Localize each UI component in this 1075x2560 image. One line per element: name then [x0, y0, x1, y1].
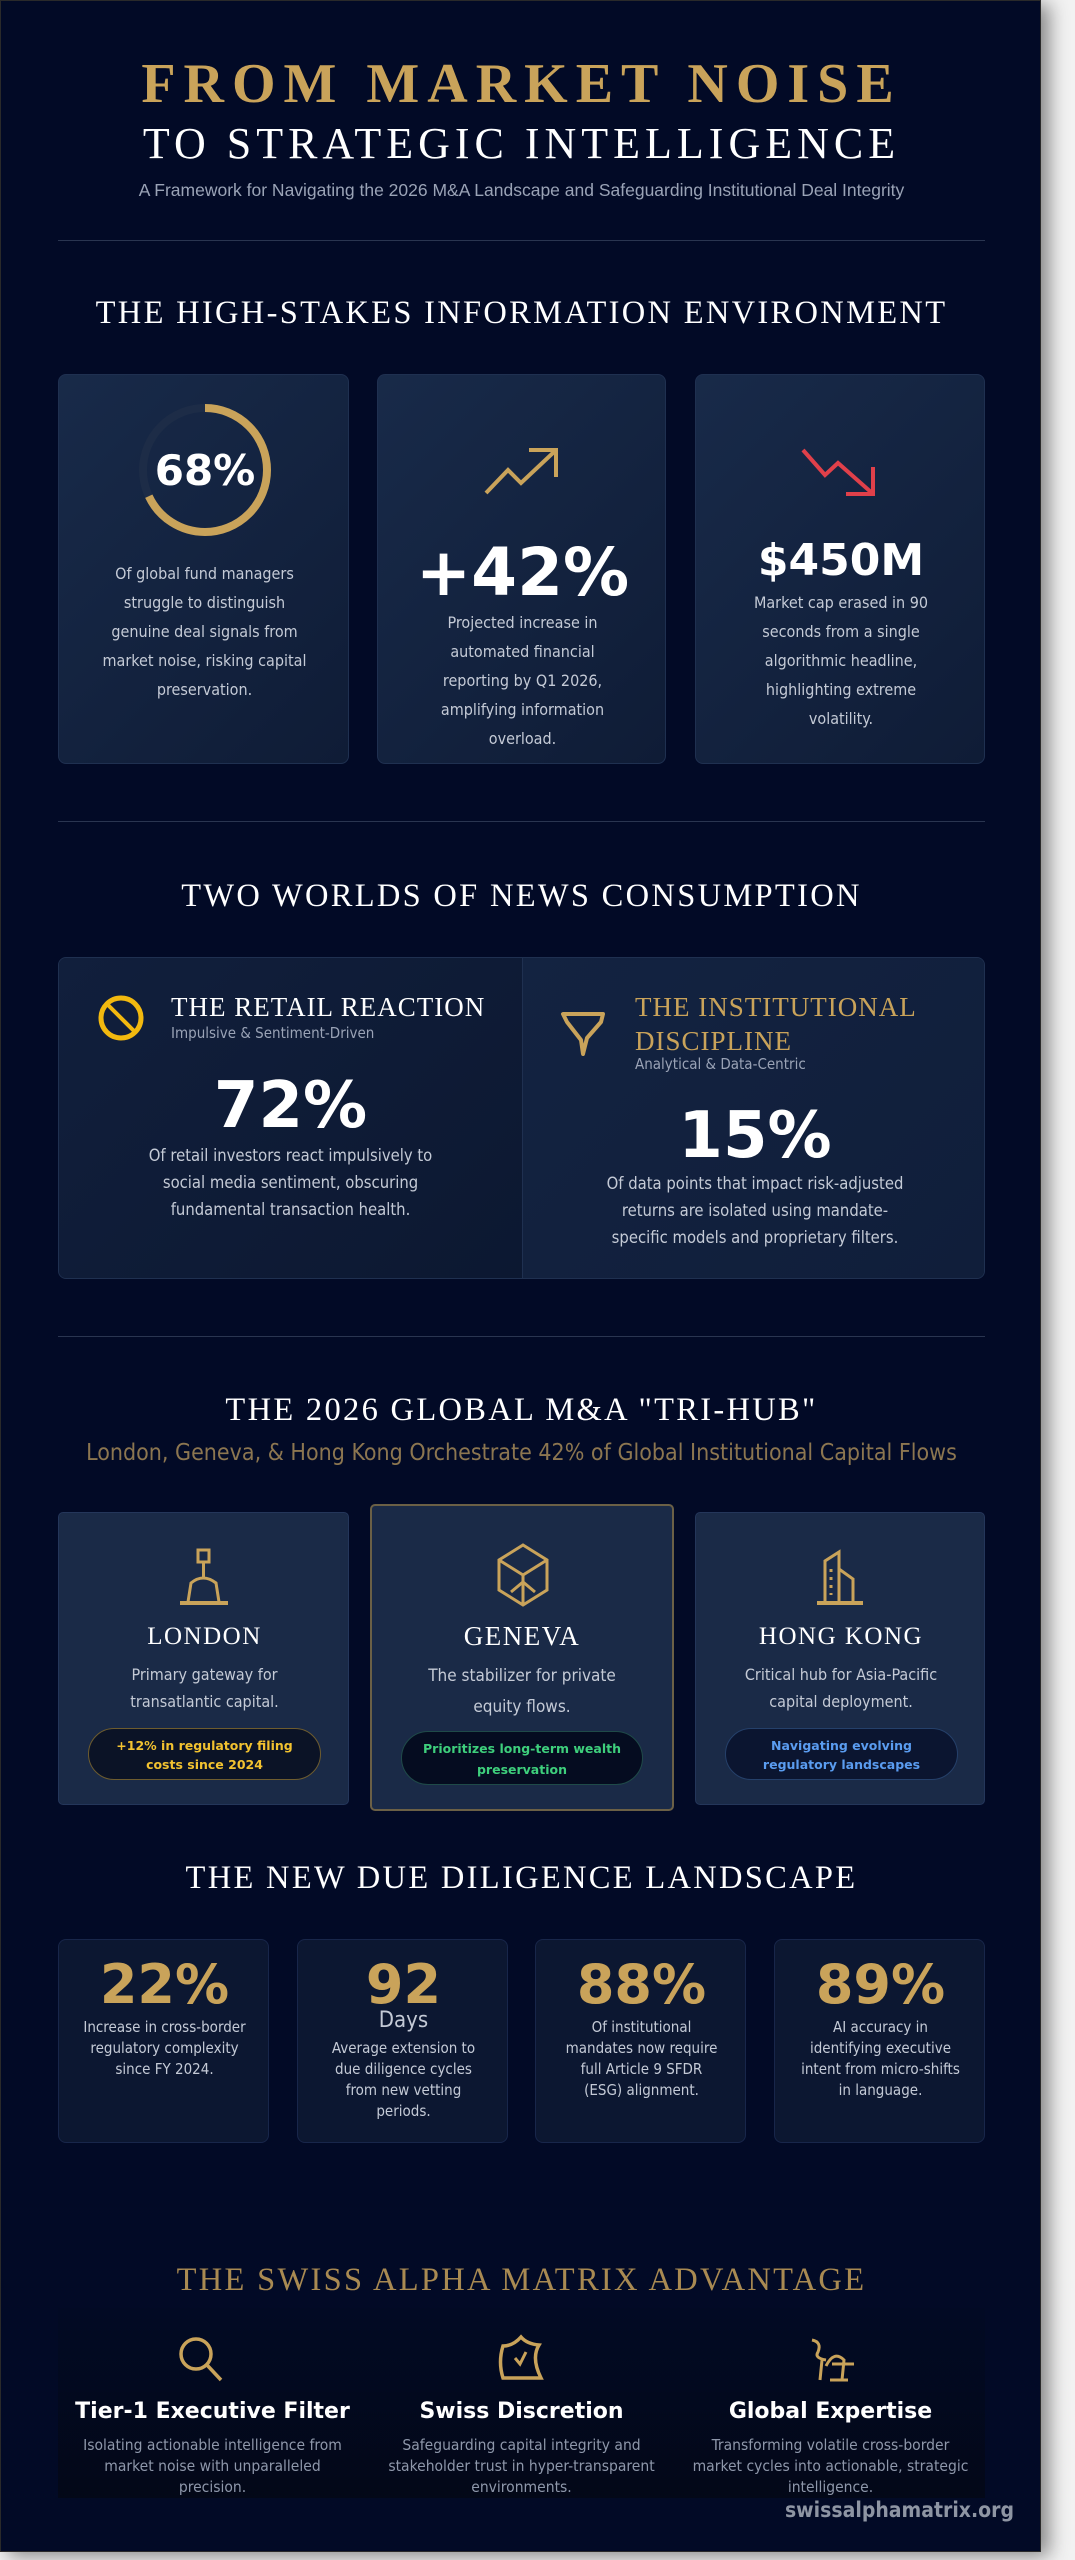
card: $450M	[695, 374, 985, 764]
panel: advantages	[58, 2308, 985, 2498]
card: 89%	[774, 1939, 985, 2143]
card: 92 days: 92	[366, 1953, 441, 2016]
heading: tri-hub: THE 2026 GLOBAL M&A "TRI-HUB"	[225, 1392, 818, 1428]
advantage: filter: Isolating actionable intelligence from market noise with unparalleled precision.	[83, 2436, 342, 2496]
card: 22%: 22%	[100, 1953, 229, 2016]
advantage: discretion	[388, 2334, 655, 2496]
card: hong kong: Critical hub for Asia-Pacific capital deployment.	[745, 1665, 937, 1711]
heading: swiss alpha: THE SWISS ALPHA MATRIX ADVANTAGE	[177, 2262, 866, 2298]
advantage: global: intelligence.	[788, 2478, 873, 2496]
subtitle: tri-hub: London, Geneva, & Hong Kong Orchestrate 42% of Global Institutional Capital Flows	[86, 1440, 957, 1466]
card: 92 days: Days	[379, 2008, 428, 2033]
advantage: discretion: Safeguarding capital integrity and stakeholder trust in hyper-transparent environments.	[388, 2436, 655, 2496]
card: $450M: Market cap erased in 90 seconds from a single algorithmic headline, highlighting extreme volatility.	[754, 593, 928, 728]
card: geneva: The stabilizer for private equity flows.	[428, 1666, 616, 1717]
advantage: global	[693, 2338, 968, 2496]
panel: institutional: Of data points that impact risk-adjusted returns are isolated using mandate-specific models and proprietary filters.	[607, 1174, 903, 1247]
card: geneva: preservation	[477, 1762, 567, 1777]
card: 88%: 88%	[577, 1953, 706, 2016]
card: 88%: Of institutional mandates now require full Article 9 SFDR (ESG) alignment.	[566, 2018, 717, 2099]
panel: retail: Impulsive & Sentiment-Driven	[171, 1024, 374, 1042]
card: +42%: Projected increase in automated financial reporting by Q1 2026, amplifying information overload.	[441, 613, 604, 748]
panel: news consumption	[58, 957, 985, 1279]
card: 92 days: Average extension to due diligence cycles from new vetting periods.	[332, 2039, 475, 2120]
stat: +42%	[416, 534, 629, 611]
panel: retail: Of retail investors react impulsively to social media sentiment, obscuring fundamental transaction health.	[149, 1146, 432, 1219]
panel: retail: THE RETAIL REACTION	[171, 992, 485, 1022]
card: 89%: 89%	[816, 1953, 945, 2016]
card: london: Primary gateway for transatlantic capital.	[130, 1665, 279, 1711]
panel: institutional: Analytical & Data-Centric	[635, 1055, 806, 1073]
icon: london	[180, 1548, 228, 1605]
icon: retail	[98, 996, 144, 1040]
card: hong kong: regulatory landscapes	[763, 1757, 920, 1772]
card: +42%	[377, 374, 666, 764]
icon: trend up	[484, 448, 558, 494]
advantage: filter: Tier-1 Executive Filter	[75, 2399, 350, 2424]
panel: retail: 72%	[214, 1069, 367, 1143]
card: london: LONDON	[147, 1623, 262, 1650]
text: Of global fund managers struggle to distinguish genuine deal signals from market noise, risking capital preservation.	[103, 564, 306, 699]
heading: high-stakes: THE HIGH-STAKES INFORMATION ENVIRONMENT	[96, 295, 947, 331]
panel: institutional: 15%	[678, 1099, 832, 1173]
icon: hong kong	[817, 1549, 863, 1605]
title: FROM MARKET NOISE	[141, 53, 902, 115]
icon: geneva	[498, 1543, 548, 1607]
panel: institutional	[522, 958, 986, 1280]
pill: +12% in regulatory filing	[116, 1738, 293, 1753]
pill: costs since 2024	[146, 1757, 263, 1772]
card: hong kong	[695, 1512, 985, 1805]
card: $450M: $450M	[758, 535, 924, 586]
heading: two worlds: TWO WORLDS OF NEWS CONSUMPTION	[181, 878, 862, 914]
advantage: discretion: Swiss Discretion	[419, 2399, 624, 2424]
advantage: filter	[75, 2337, 350, 2496]
title: TO STRATEGIC INTELLIGENCE	[143, 119, 900, 168]
title	[141, 53, 902, 168]
subtitle: A Framework for Navigating the 2026 M&A Landscape and Safeguarding Institutional Deal Integrity	[139, 180, 904, 200]
icon: funnel	[560, 1012, 605, 1056]
card: hong kong: Navigating evolving	[771, 1738, 912, 1753]
panel: institutional: THE INSTITUTIONAL	[635, 992, 917, 1022]
card: 88%	[535, 1939, 746, 2143]
card: 68%	[58, 374, 349, 764]
panel: retail	[59, 958, 522, 1280]
panel: institutional: DISCIPLINE	[635, 1026, 792, 1056]
card: 92 days	[297, 1939, 508, 2143]
card: geneva: GENEVA	[464, 1621, 580, 1651]
heading: due diligence: THE NEW DUE DILIGENCE LANDSCAPE	[186, 1860, 857, 1896]
card: 89%: AI accuracy in identifying executive intent from micro-shifts in language.	[801, 2018, 960, 2099]
advantage: global: Global Expertise	[729, 2399, 932, 2424]
advantage: global: Transforming volatile cross-border	[712, 2436, 949, 2454]
footer url: swissalphamatrix.org	[785, 2498, 1014, 2522]
pill	[88, 1728, 321, 1780]
advantage: global: market cycles into actionable, strategic	[693, 2457, 968, 2475]
donut chart	[145, 404, 271, 536]
card: hong kong: HONG KONG	[759, 1623, 923, 1650]
card: geneva: Prioritizes long-term wealth	[423, 1741, 621, 1756]
card: 22%: Increase in cross-border regulatory complexity since FY 2024.	[83, 2018, 246, 2078]
card: geneva	[370, 1504, 674, 1811]
donut chart: 68%	[155, 446, 255, 495]
card: 22%	[58, 1939, 269, 2143]
card: london	[58, 1512, 349, 1805]
icon: trend down	[802, 448, 875, 496]
